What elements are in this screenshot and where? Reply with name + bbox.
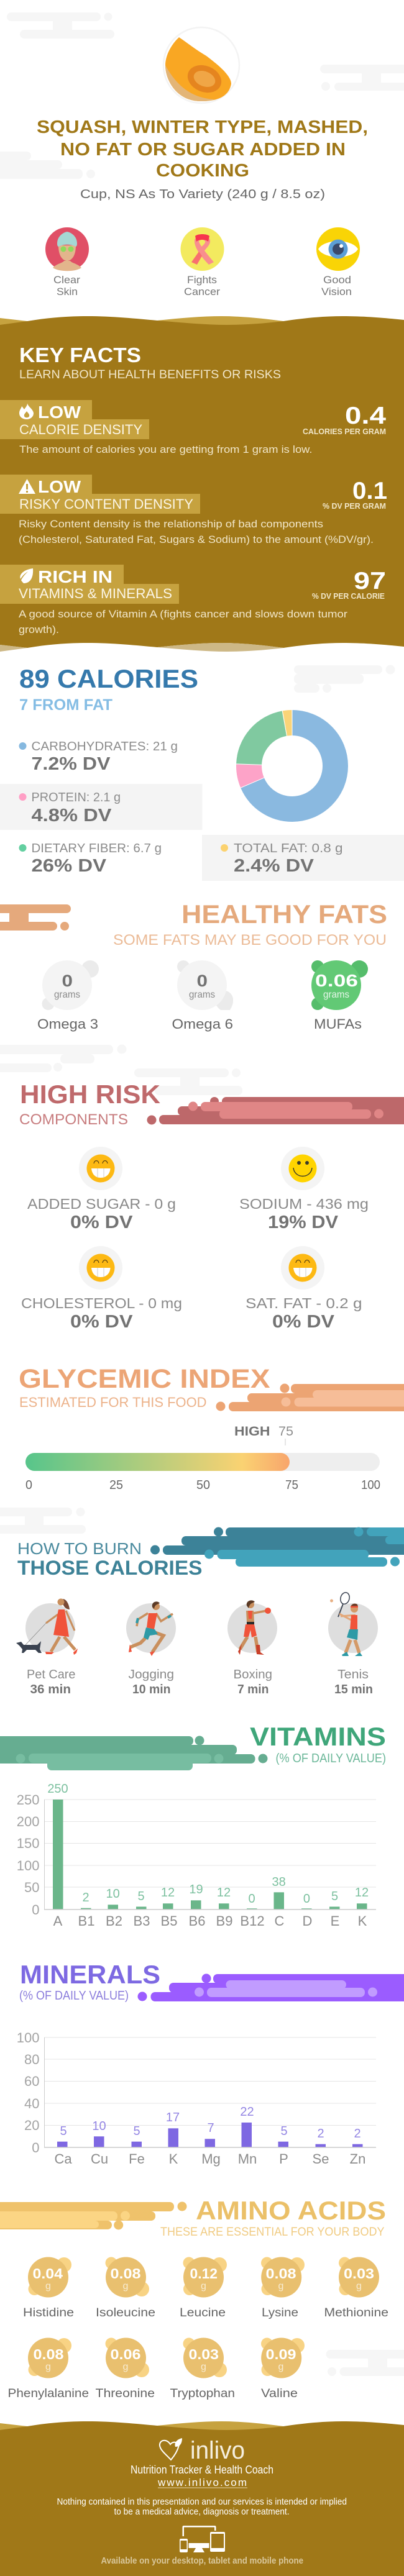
gauge: glycemic value — [25, 1424, 380, 1492]
amino: histidine — [23, 2257, 74, 2319]
bar chart: minerals: Cu — [91, 2151, 108, 2167]
fact: low risky content density: LOW — [38, 477, 81, 496]
heading: calories — [19, 664, 198, 714]
bar chart: vitamins: 5 — [137, 1890, 145, 1903]
heading: amino acids: THESE ARE ESSENTIAL FOR YOUR BODY — [160, 2226, 385, 2239]
amino: leucine — [180, 2257, 227, 2319]
bar chart: minerals: Zn — [350, 2151, 365, 2167]
benefit: fights cancer: Cancer — [184, 286, 220, 298]
risk: saturated fat: 0% DV — [272, 1312, 335, 1332]
heading: healthy fats — [113, 899, 387, 949]
activity: jogging: Jogging — [128, 1668, 174, 1682]
legend: total fat — [221, 842, 343, 876]
heading: glycemic index: GLYCEMIC INDEX — [19, 1364, 270, 1394]
bar chart: minerals: P — [279, 2151, 288, 2167]
amino: methionine: 0.03 — [344, 2265, 374, 2282]
bar chart: vitamins: 12 — [217, 1886, 231, 1900]
bar chart: vitamins: A — [53, 1913, 63, 1929]
risk: cholesterol — [21, 1246, 182, 1332]
amino: lysine: g — [278, 2281, 283, 2292]
heading: burn calories — [17, 1539, 203, 1579]
title: SQUASH, WINTER TYPE, MASHED, — [37, 117, 368, 137]
legend: total fat: TOTAL FAT: 0.8 g — [234, 842, 343, 855]
risk: added sugar: 0% DV — [70, 1213, 133, 1232]
brand name: inlivo — [190, 2437, 245, 2464]
title — [37, 117, 368, 181]
serving size subtitle: Cup, NS As To Variety (240 g / 8.5 oz) — [80, 188, 325, 201]
benefit: good vision: Good — [323, 274, 351, 286]
fat: omega 6 — [172, 960, 233, 1032]
amino: phenylalanine — [7, 2338, 89, 2400]
fat: omega 3 — [37, 960, 99, 1032]
bar chart: vitamins: E — [331, 1913, 339, 1929]
icon: leaf — [20, 568, 33, 583]
bar chart: vitamins: B3 — [134, 1913, 150, 1929]
fact: low calorie density: CALORIE DENSITY — [19, 422, 142, 437]
gauge: glycemic value: HIGH — [234, 1424, 270, 1439]
amino: tryptophan — [170, 2338, 235, 2400]
fat: mufas: grams — [323, 990, 349, 1000]
legend: carbohydrates: CARBOHYDRATES: 21 g — [31, 740, 178, 753]
bar chart: vitamins: 150 — [17, 1836, 40, 1851]
amino: valine: Valine — [261, 2387, 298, 2400]
fact: low risky content density — [0, 475, 387, 545]
activity: jogging — [126, 1601, 176, 1696]
bar chart: minerals: 40 — [24, 2096, 40, 2111]
gauge: glycemic value: 0 — [25, 1478, 32, 1492]
bar chart: vitamins: 200 — [17, 1814, 40, 1829]
activity: tennis: Tenis — [337, 1668, 369, 1682]
bar chart: vitamins: 10 — [106, 1887, 120, 1901]
panel: high risk components — [19, 1080, 404, 1332]
benefit: good vision — [316, 227, 360, 298]
amino: phenylalanine: Phenylalanine — [7, 2387, 89, 2400]
activity: boxing: 7 min — [237, 1683, 269, 1696]
ribbon: vitamins — [0, 1736, 267, 1770]
amino: lysine — [261, 2257, 305, 2319]
amino: valine — [261, 2338, 305, 2400]
risk: added sugar — [27, 1147, 176, 1232]
benefit: fights cancer: Fights — [187, 274, 217, 286]
heading: calories: 89 CALORIES — [19, 664, 198, 693]
disclaimer: to be a medical advice, diagnosis or treatment. — [114, 2506, 290, 2517]
risk: added sugar: ADDED SUGAR - 0 g — [27, 1196, 176, 1212]
ribbon: minerals — [138, 1974, 404, 2001]
activity: boxing — [227, 1600, 277, 1696]
fat: omega 3: grams — [54, 990, 80, 1000]
fat: mufas — [311, 960, 368, 1032]
bar chart: vitamins: 2 — [82, 1891, 90, 1905]
bar chart: vitamins: B1 — [78, 1913, 94, 1929]
amino: tryptophan: Tryptophan — [170, 2387, 235, 2400]
risk: sodium: SODIUM - 436 mg — [239, 1196, 369, 1212]
fact: low risky content density: Risky Content density is the relationship of bad components — [19, 519, 323, 530]
fat: omega 3: Omega 3 — [37, 1016, 98, 1032]
fact: low calorie density — [0, 400, 386, 455]
panel: how to burn those calories — [16, 1527, 404, 1696]
activity: pet care: Pet Care — [27, 1668, 76, 1682]
bar chart: vitamins: 12 — [355, 1886, 369, 1900]
bar chart: minerals: 0 — [32, 2140, 40, 2155]
bar chart: vitamins: 250 — [47, 1782, 68, 1796]
icon: warning triangle — [19, 479, 35, 494]
heading: burn calories: HOW TO BURN — [17, 1539, 142, 1558]
amino: threonine: g — [123, 2362, 128, 2372]
fact: low risky content density: RISKY CONTENT DENSITY — [19, 496, 193, 512]
bar chart: vitamins: 50 — [24, 1880, 40, 1895]
bar chart: minerals: 10 — [92, 2119, 106, 2133]
bar chart: vitamins: 5 — [331, 1890, 338, 1903]
bar chart: minerals: 60 — [24, 2073, 40, 2089]
bar chart: minerals: Mg — [201, 2151, 221, 2167]
legend: protein — [19, 791, 121, 826]
bar chart: vitamins: B2 — [106, 1913, 122, 1929]
heading: high risk — [19, 1080, 160, 1128]
fact: rich in vitamins and minerals: RICH IN — [38, 567, 112, 586]
bar chart: vitamins: B12 — [240, 1913, 265, 1929]
amino: methionine: Methionine — [324, 2306, 388, 2319]
availability note: Available on your desktop, tablet and mobile phone — [101, 2556, 303, 2566]
activity: tennis: 15 min — [334, 1683, 373, 1696]
bar chart: minerals: 5 — [133, 2124, 140, 2138]
benefit: clear skin — [45, 227, 89, 298]
bar chart: vitamins: 100 — [17, 1858, 40, 1873]
gauge: glycemic value: 50 — [196, 1478, 210, 1492]
bar chart: minerals: 17 — [166, 2111, 180, 2124]
bar chart: vitamins: B6 — [189, 1913, 205, 1929]
fact: low risky content density: % DV PER GRAM — [323, 501, 386, 511]
bar chart: minerals: Se — [313, 2151, 329, 2167]
fact: rich in vitamins and minerals — [0, 565, 386, 635]
bar chart: minerals: 2 — [354, 2127, 361, 2141]
bar chart: vitamins: 19 — [189, 1883, 203, 1896]
bar chart: vitamins: 0 — [32, 1902, 40, 1918]
activity: pet care — [16, 1599, 78, 1696]
heading: vitamins — [250, 1722, 386, 1765]
panel: minerals — [17, 1960, 404, 2167]
bar chart: vitamins: B9 — [216, 1913, 232, 1929]
fat: mufas: MUFAs — [314, 1016, 362, 1032]
amino: phenylalanine: 0.08 — [34, 2346, 64, 2362]
fat: omega 6: 0 — [196, 972, 208, 990]
title: COOKING — [156, 161, 249, 181]
icon: devices — [180, 2526, 225, 2552]
fact: low calorie density: CALORIES PER GRAM — [303, 427, 386, 436]
heading: burn calories: THOSE CALORIES — [17, 1557, 203, 1579]
amino: threonine: Threonine — [96, 2387, 155, 2400]
bar chart: vitamins: K — [358, 1913, 367, 1929]
heading: healthy fats: SOME FATS MAY BE GOOD FOR YOU — [113, 932, 387, 949]
bar chart: minerals: 80 — [24, 2052, 40, 2067]
bar chart: minerals: K — [169, 2151, 178, 2167]
heading: high risk: HIGH RISK — [20, 1080, 160, 1109]
benefit: clear skin: Skin — [57, 286, 78, 298]
heading: high risk: COMPONENTS — [19, 1111, 128, 1128]
website link: www.inlivo.com — [157, 2477, 247, 2488]
amino: threonine — [96, 2338, 155, 2400]
fact: low calorie density: LOW — [38, 403, 81, 422]
disclaimer — [57, 2496, 347, 2517]
amino: lysine: Lysine — [262, 2306, 298, 2319]
risk: sodium — [239, 1147, 369, 1232]
bar chart: vitamins: 0 — [303, 1892, 310, 1906]
activity: boxing: Boxing — [234, 1668, 272, 1682]
legend: carbohydrates: 7.2% DV — [31, 754, 111, 774]
activity: tennis — [328, 1591, 378, 1696]
bar chart: vitamins: 12 — [161, 1886, 175, 1900]
ribbon: healthy fats — [0, 904, 71, 931]
panel: calories — [0, 664, 404, 881]
activity: pet care: 36 min — [30, 1683, 71, 1696]
bar chart: minerals: 5 — [280, 2124, 288, 2138]
heading: key facts: KEY FACTS — [19, 344, 141, 366]
icon: squash — [163, 27, 239, 103]
heading: minerals: (% OF DAILY VALUE) — [19, 1989, 129, 2003]
gauge: glycemic value: 25 — [109, 1478, 123, 1492]
bar chart: minerals: 2 — [317, 2127, 324, 2141]
bar chart: minerals: Ca — [54, 2151, 72, 2167]
bar chart: vitamins: 38 — [272, 1875, 286, 1889]
panel: vitamins — [0, 1722, 386, 1929]
title: NO FAT OR SUGAR ADDED IN — [60, 140, 346, 160]
ribbon: high risk — [147, 1097, 404, 1124]
risk: cholesterol: CHOLESTEROL - 0 mg — [21, 1295, 182, 1311]
amino: isoleucine: g — [123, 2281, 128, 2292]
fact: rich in vitamins and minerals: growth). — [19, 624, 59, 635]
bar chart: vitamins: 0 — [248, 1892, 255, 1906]
heading: healthy fats: HEALTHY FATS — [181, 899, 387, 929]
fact: rich in vitamins and minerals: % DV PER CALORIE — [312, 591, 385, 601]
benefit: clear skin: Clear — [53, 274, 80, 286]
amino: methionine — [324, 2257, 388, 2319]
gauge: glycemic value: 75 — [285, 1478, 298, 1492]
legend: protein: PROTEIN: 2.1 g — [31, 791, 121, 804]
panel: healthy fats — [0, 899, 387, 1032]
footer — [0, 2421, 404, 2576]
amino: leucine: g — [201, 2281, 206, 2292]
disclaimer: Nothing contained in this presentation and our services is intended or implied — [57, 2496, 347, 2507]
legend: protein: 4.8% DV — [31, 806, 112, 826]
heading: vitamins: VITAMINS — [250, 1722, 386, 1751]
legend: dietary fiber — [19, 842, 162, 876]
gauge: glycemic value: 75 — [278, 1424, 293, 1439]
tagline: Nutrition Tracker & Health Coach — [131, 2464, 273, 2476]
risk: saturated fat — [246, 1246, 362, 1332]
amino: leucine: Leucine — [180, 2306, 226, 2319]
amino: valine: g — [278, 2362, 283, 2372]
fact: low calorie density: The amount of calories you are getting from 1 gram is low. — [19, 444, 312, 455]
amino: lysine: 0.08 — [266, 2265, 296, 2282]
amino: isoleucine: Isoleucine — [96, 2306, 155, 2319]
amino: histidine: g — [45, 2281, 51, 2292]
heading: minerals — [19, 1960, 160, 2003]
fat: omega 6: Omega 6 — [172, 1016, 233, 1032]
bar chart: vitamins — [17, 1782, 376, 1929]
gauge: glycemic value: 100 — [361, 1478, 380, 1492]
bar chart: vitamins: C — [275, 1913, 285, 1929]
amino: tryptophan: 0.03 — [189, 2346, 219, 2362]
bar chart: vitamins: D — [303, 1913, 312, 1929]
heading: minerals: MINERALS — [20, 1960, 160, 1989]
bar chart: vitamins: B5 — [161, 1913, 177, 1929]
bar chart: minerals: Fe — [129, 2151, 145, 2167]
heading: key facts: LEARN ABOUT HEALTH BENEFITS OR RISKS — [19, 368, 281, 381]
icon: inlivo logo — [160, 2438, 182, 2460]
heading: amino acids — [160, 2196, 386, 2239]
header: food title — [37, 27, 368, 298]
legend: total fat: 2.4% DV — [234, 856, 314, 876]
amino: isoleucine — [96, 2257, 155, 2319]
panel: amino acids — [0, 2196, 388, 2400]
risk: sodium: 19% DV — [268, 1213, 339, 1232]
bar chart: minerals: 22 — [240, 2105, 254, 2119]
heading: calories: 7 FROM FAT — [19, 696, 112, 714]
legend: dietary fiber: 26% DV — [31, 856, 107, 876]
amino: histidine: Histidine — [23, 2306, 74, 2319]
fact: rich in vitamins and minerals: VITAMINS & MINERALS — [19, 586, 172, 601]
amino: phenylalanine: g — [45, 2362, 51, 2372]
fat: omega 6: grams — [189, 990, 215, 1000]
amino: tryptophan: g — [201, 2362, 206, 2372]
panel: glycemic index — [19, 1364, 404, 1492]
bar chart: minerals: 20 — [24, 2118, 40, 2133]
amino: isoleucine: 0.08 — [111, 2265, 141, 2282]
bar chart: vitamins: 250 — [17, 1792, 40, 1808]
amino: valine: 0.09 — [266, 2346, 296, 2362]
amino: threonine: 0.06 — [111, 2346, 140, 2362]
risk: saturated fat: SAT. FAT - 0.2 g — [246, 1295, 362, 1311]
fact: low calorie density: 0.4 — [345, 403, 386, 429]
fact: rich in vitamins and minerals: A good source of Vitamin A (fights cancer and slows down tumor — [19, 609, 348, 620]
amino: leucine: 0.12 — [190, 2265, 218, 2282]
amino: methionine: g — [356, 2281, 362, 2292]
heading: glycemic index — [19, 1364, 270, 1410]
amino: histidine: 0.04 — [32, 2265, 63, 2282]
fact: low risky content density: (Cholesterol, Saturated Fat, Sugars & Sodium) to the amount (%DV/gr). — [19, 534, 374, 545]
fact: rich in vitamins and minerals: 97 — [354, 568, 386, 594]
risk: cholesterol: 0% DV — [70, 1312, 133, 1332]
ribbon: glycemic index — [216, 1384, 404, 1411]
bar chart: minerals: Mn — [238, 2151, 257, 2167]
legend: dietary fiber: DIETARY FIBER: 6.7 g — [31, 842, 162, 855]
benefit: fights cancer — [180, 227, 224, 298]
bar chart: minerals: 100 — [17, 2030, 40, 2046]
legend: carbohydrates — [19, 740, 178, 774]
panel: key facts — [0, 316, 404, 652]
activity: jogging: 10 min — [132, 1683, 170, 1696]
ribbon: burn calories — [150, 1527, 404, 1567]
icon: flame — [19, 403, 34, 419]
bar chart: minerals: 5 — [60, 2124, 67, 2138]
benefit: good vision: Vision — [321, 286, 352, 298]
heading: amino acids: AMINO ACIDS — [196, 2196, 386, 2225]
heading: vitamins: (% OF DAILY VALUE) — [276, 1752, 386, 1765]
bar chart: minerals — [17, 2030, 376, 2167]
heading: key facts — [19, 344, 281, 381]
donut chart — [236, 710, 336, 809]
heading: glycemic index: ESTIMATED FOR THIS FOOD — [19, 1395, 206, 1410]
bar chart: minerals: 7 — [207, 2121, 214, 2135]
ribbon: amino acids — [0, 2201, 186, 2230]
fat: mufas: 0.06 — [315, 971, 358, 990]
fact: low risky content density: 0.1 — [352, 478, 387, 504]
fat: omega 3: 0 — [62, 972, 73, 990]
